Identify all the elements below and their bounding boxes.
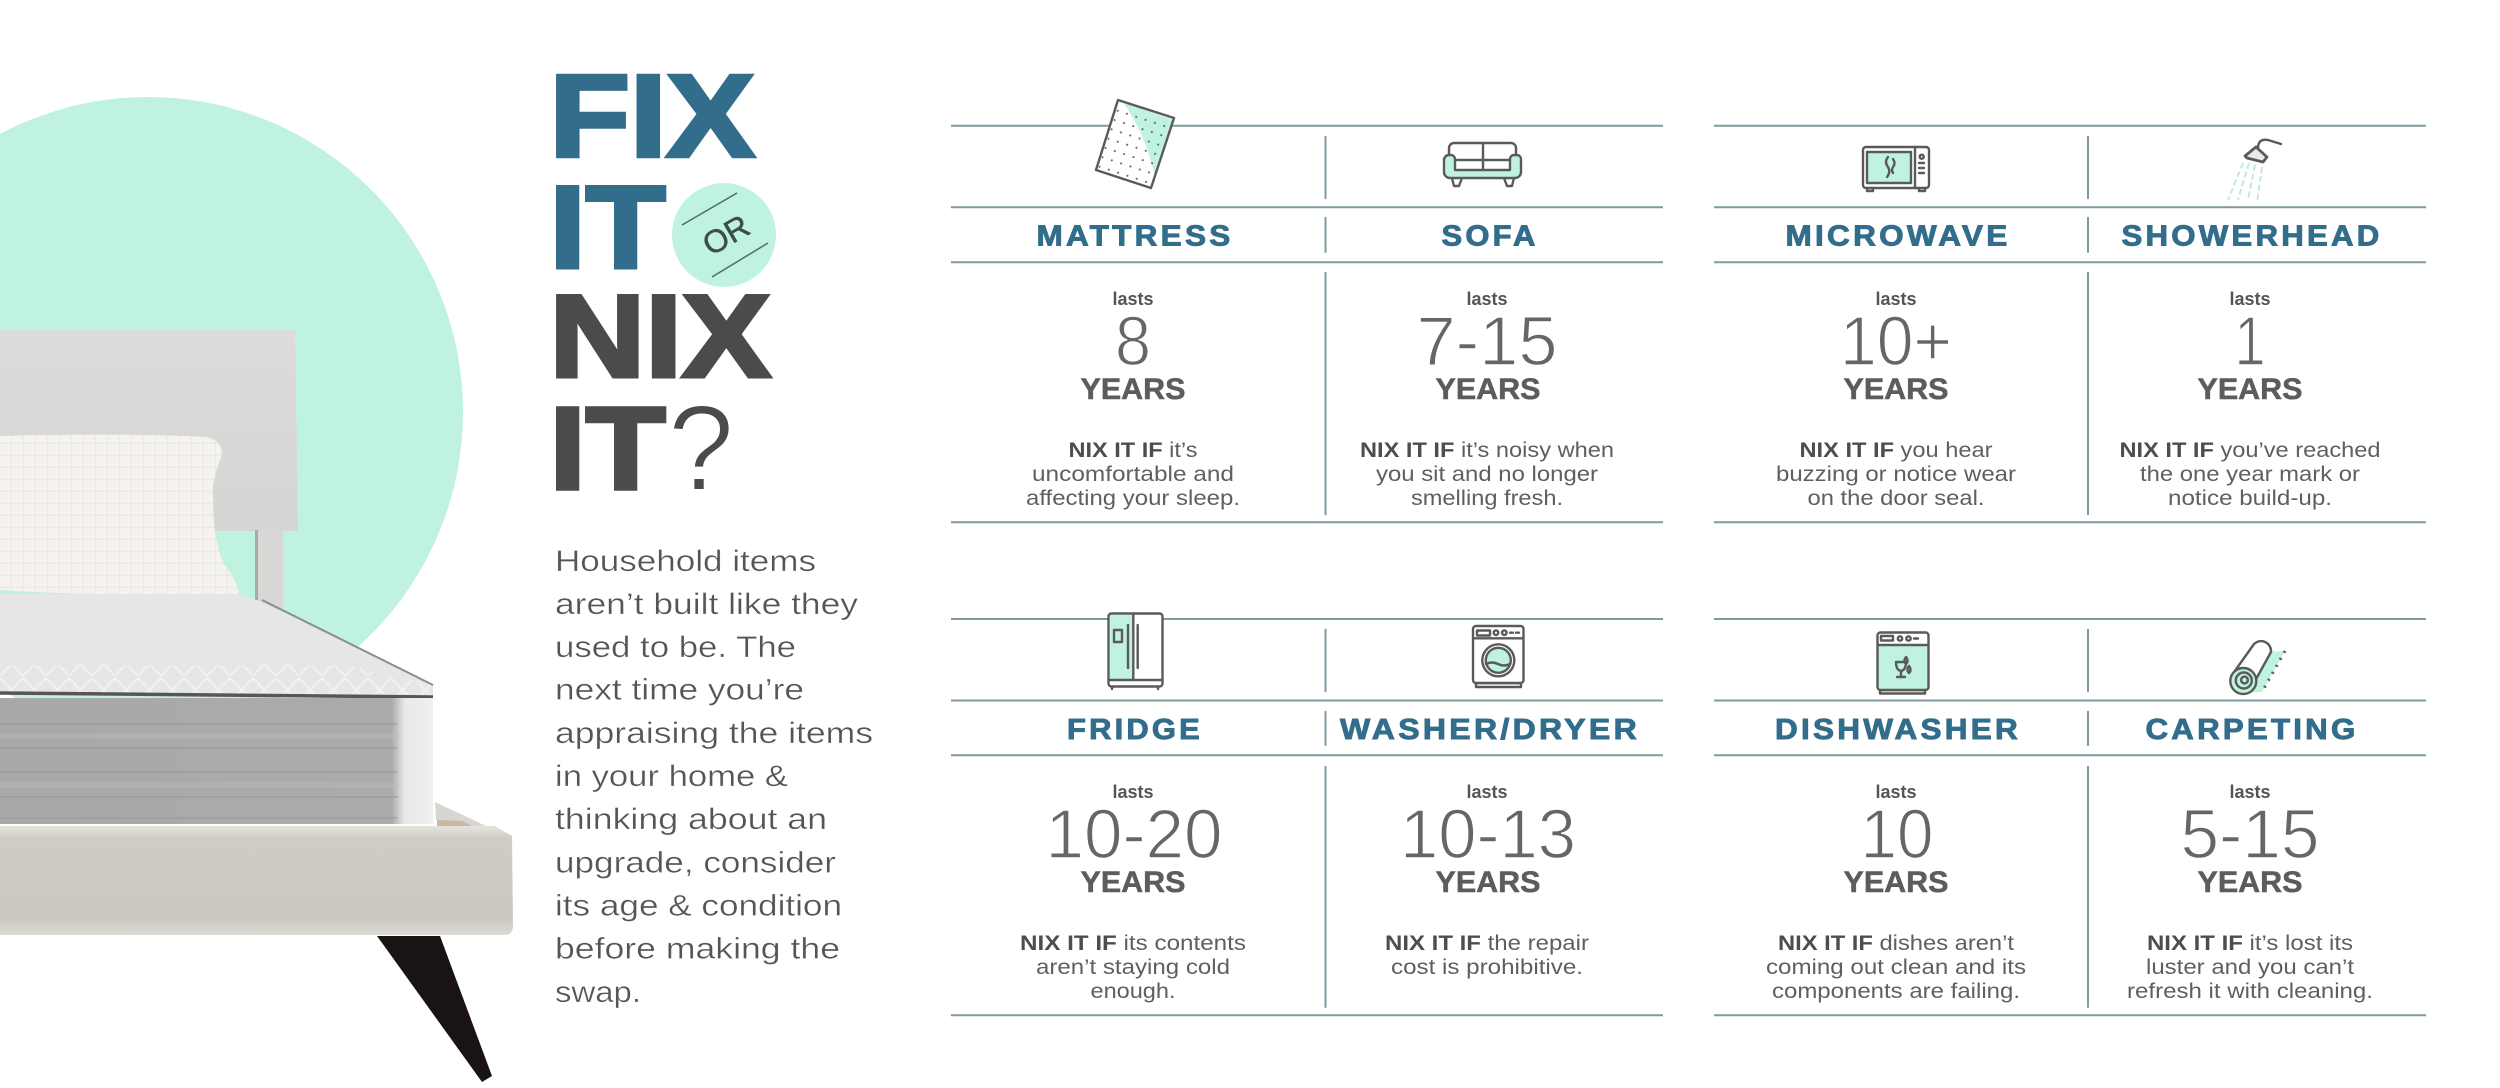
mattress top xyxy=(0,594,433,697)
years label: YEARS xyxy=(1080,866,1186,899)
title line: IT: IT xyxy=(550,383,666,514)
title: fix it or nix it? xyxy=(550,50,770,516)
years label: YEARS xyxy=(1844,866,1948,899)
nix it if text xyxy=(1385,932,1589,979)
intro paragraph: Household items xyxy=(555,545,816,578)
mattress side xyxy=(0,698,433,824)
heading: CARPETING xyxy=(2146,714,2358,746)
intro paragraph: in your home & xyxy=(555,760,788,793)
lasts label: lasts xyxy=(1875,289,1917,309)
photo: bed with mattress xyxy=(0,330,513,1082)
nix it if text xyxy=(1360,439,1614,510)
pillow xyxy=(0,435,239,596)
lasts label: lasts xyxy=(1112,289,1154,309)
intro paragraph: aren’t built like they xyxy=(555,588,858,621)
heading: MICROWAVE xyxy=(1786,221,2010,253)
headboard post xyxy=(255,530,283,610)
lifespan number: 10 xyxy=(1860,795,1934,873)
nix it if text: NIX IT IF the repair xyxy=(1385,932,1589,955)
heading: MATTRESS xyxy=(1036,221,1234,253)
lasts label: lasts xyxy=(1112,782,1154,802)
lasts label: lasts xyxy=(1466,289,1508,309)
panel: showerhead xyxy=(2120,140,2382,510)
panel: carpeting xyxy=(2127,641,2373,1003)
panel: dishwasher xyxy=(1766,632,2026,1003)
lasts label: lasts xyxy=(1466,782,1508,802)
lasts label: lasts xyxy=(2229,782,2271,802)
panel: microwave xyxy=(1776,147,2016,510)
nix it if text: you sit and no longer xyxy=(1376,463,1598,486)
panel: washer/dryer xyxy=(1340,626,1640,979)
lifespan number: 1 xyxy=(2234,302,2266,380)
heading: SHOWERHEAD xyxy=(2122,221,2382,253)
nix it if text: notice build-up. xyxy=(2168,487,2332,510)
title line: FIX: FIX xyxy=(550,50,754,181)
icon: washer xyxy=(1473,626,1524,687)
decorative mint circle xyxy=(0,97,463,727)
icon: fridge xyxy=(1108,614,1162,689)
lifespan number: 8 xyxy=(1115,302,1151,380)
icon: showerhead xyxy=(2228,140,2281,202)
lifespan number: 10+ xyxy=(1840,302,1952,380)
intro paragraph: before making the xyxy=(555,932,840,966)
nix it if text xyxy=(1020,932,1246,1003)
nix it if text: coming out clean and its xyxy=(1766,956,2026,979)
lifespan number: 5-15 xyxy=(2180,795,2320,873)
years label: YEARS xyxy=(1436,373,1540,406)
lifespan number: 10-20 xyxy=(1046,795,1222,873)
title line: IT: IT xyxy=(550,162,666,292)
nix it if text: aren’t staying cold xyxy=(1036,956,1230,979)
nix it if text: uncomfortable and xyxy=(1032,463,1234,486)
title question mark: ? xyxy=(668,380,734,516)
bed leg xyxy=(377,936,492,1082)
icon: dishwasher xyxy=(1878,632,1928,694)
lifespan number: 7-15 xyxy=(1416,302,1558,380)
nix it if text: smelling fresh. xyxy=(1411,487,1563,510)
years label: YEARS xyxy=(2198,866,2302,899)
lasts label: lasts xyxy=(1875,782,1917,802)
panel: sofa xyxy=(1360,143,1614,510)
nix it if text: NIX IT IF it’s noisy when xyxy=(1360,439,1614,462)
icon: sofa xyxy=(1444,143,1521,186)
badge: or xyxy=(672,183,776,287)
panel: fridge xyxy=(1020,614,1246,1003)
panel: mattress xyxy=(1026,100,1240,510)
intro paragraph xyxy=(555,545,873,1009)
nix it if text: NIX IT IF dishes aren’t xyxy=(1778,932,2014,955)
nix it if text xyxy=(1766,932,2026,1003)
intro paragraph: its age & condition xyxy=(555,890,842,922)
nix it if text xyxy=(2127,932,2373,1003)
intro paragraph: upgrade, consider xyxy=(555,846,836,880)
nix it if text: enough. xyxy=(1090,980,1176,1003)
years label: YEARS xyxy=(2198,373,2302,406)
intro paragraph: thinking about an xyxy=(555,803,827,836)
nix it if text: NIX IT IF it’s xyxy=(1068,439,1198,462)
nix it if text: cost is prohibitive. xyxy=(1391,956,1583,979)
years label: YEARS xyxy=(1844,373,1948,406)
nix it if text: the one year mark or xyxy=(2140,463,2360,486)
intro paragraph: swap. xyxy=(555,976,641,1009)
heading: WASHER/DRYER xyxy=(1340,714,1640,746)
icon: mattress xyxy=(1096,100,1174,188)
intro paragraph: next time you’re xyxy=(555,674,804,706)
icon: microwave xyxy=(1863,147,1929,191)
lifespan number: 10-13 xyxy=(1400,795,1576,873)
nix it if text: affecting your sleep. xyxy=(1026,487,1240,510)
nix it if text: NIX IT IF you hear xyxy=(1800,439,1993,462)
headboard xyxy=(0,330,298,531)
years label: YEARS xyxy=(1436,866,1540,899)
intro paragraph: used to be. The xyxy=(555,631,796,664)
nix it if text xyxy=(2120,439,2380,510)
nix it if text: components are failing. xyxy=(1772,980,2020,1003)
bed frame back rail xyxy=(435,802,503,834)
nix it if text: NIX IT IF it’s lost its xyxy=(2147,932,2353,955)
title line: NIX: NIX xyxy=(550,270,770,402)
nix it if text: NIX IT IF its contents xyxy=(1020,932,1246,955)
nix it if text: luster and you can’t xyxy=(2146,956,2354,979)
nix it if text: on the door seal. xyxy=(1808,487,1984,510)
nix it if text: buzzing or notice wear xyxy=(1776,463,2016,486)
lasts label: lasts xyxy=(2229,289,2271,309)
heading: FRIDGE xyxy=(1067,714,1203,746)
years label: YEARS xyxy=(1080,373,1186,406)
heading: SOFA xyxy=(1442,221,1538,253)
bed frame xyxy=(0,826,513,935)
heading: DISHWASHER xyxy=(1775,714,2021,746)
nix it if text xyxy=(1776,439,2016,510)
nix it if text: refresh it with cleaning. xyxy=(2127,980,2373,1003)
nix it if text xyxy=(1026,439,1240,510)
nix it if text: NIX IT IF you’ve reached xyxy=(2120,439,2380,462)
intro paragraph: appraising the items xyxy=(555,717,873,750)
icon: carpet roll xyxy=(2230,641,2285,694)
badge: or: OR xyxy=(696,207,756,263)
